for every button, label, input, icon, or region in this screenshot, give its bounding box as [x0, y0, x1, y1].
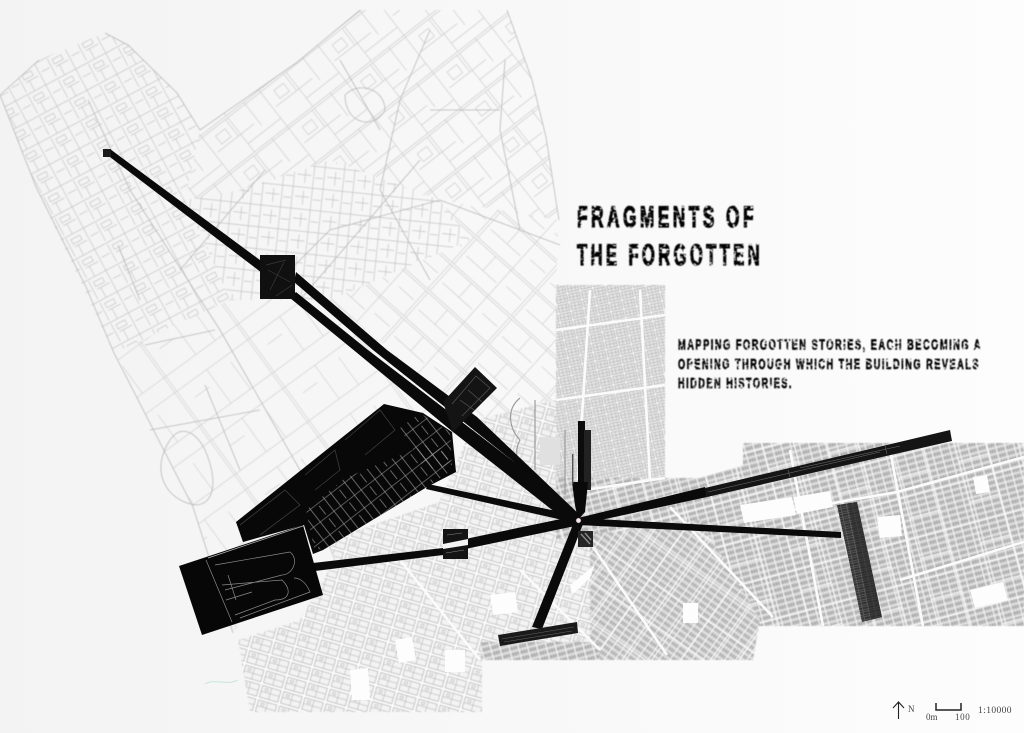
- ray: east lower: [578, 518, 841, 538]
- block: vertical tower fragment: [572, 421, 591, 520]
- map: stadium plot: [511, 398, 565, 495]
- block: large black plan fragment: [236, 404, 456, 554]
- block: east textured vertical bar: [837, 502, 882, 622]
- scale bar: 0m: [926, 712, 938, 722]
- block: black church plan fragment: [179, 525, 323, 635]
- ray: east upper: [578, 487, 707, 524]
- scale bar: 100: [955, 712, 970, 722]
- map: main roads and open plots: [350, 290, 1024, 700]
- ray: south: [532, 522, 583, 629]
- ray: north-west lower branch: [290, 292, 580, 524]
- ray: north-west long line: [106, 149, 268, 273]
- block: small square with white band: [443, 529, 468, 559]
- icon: north arrow: [893, 702, 904, 719]
- ray: to central block: [426, 484, 580, 524]
- description text: [678, 336, 982, 392]
- faint shoreline trace: [205, 680, 238, 684]
- ray: west wedge: [313, 515, 580, 571]
- block: small square south-east of hub: [578, 531, 593, 547]
- diagram: black connection rays to hub: [103, 149, 841, 629]
- small terminal square: [103, 149, 111, 157]
- title: FRAGMENTS OF: [577, 201, 757, 234]
- title: [577, 201, 763, 272]
- north label: N: [908, 704, 915, 714]
- map: light line-drawn north and west districts: [0, 10, 560, 633]
- block: east textured long bar: [705, 430, 952, 497]
- block: south textured bar: [498, 622, 578, 646]
- scale bar: [926, 703, 970, 722]
- block: black upper plan fragment: [443, 367, 497, 432]
- hub marker: [576, 518, 581, 523]
- title: THE FORGOTTEN: [577, 239, 763, 272]
- ray: north-west upper branch: [294, 272, 581, 524]
- map: dense street fabric, centre and east: [238, 285, 1024, 712]
- description text: HIDDEN HISTORIES.: [678, 375, 793, 392]
- scale ratio: 1:10000: [978, 706, 1012, 716]
- block: black square on north-west line: [260, 255, 295, 299]
